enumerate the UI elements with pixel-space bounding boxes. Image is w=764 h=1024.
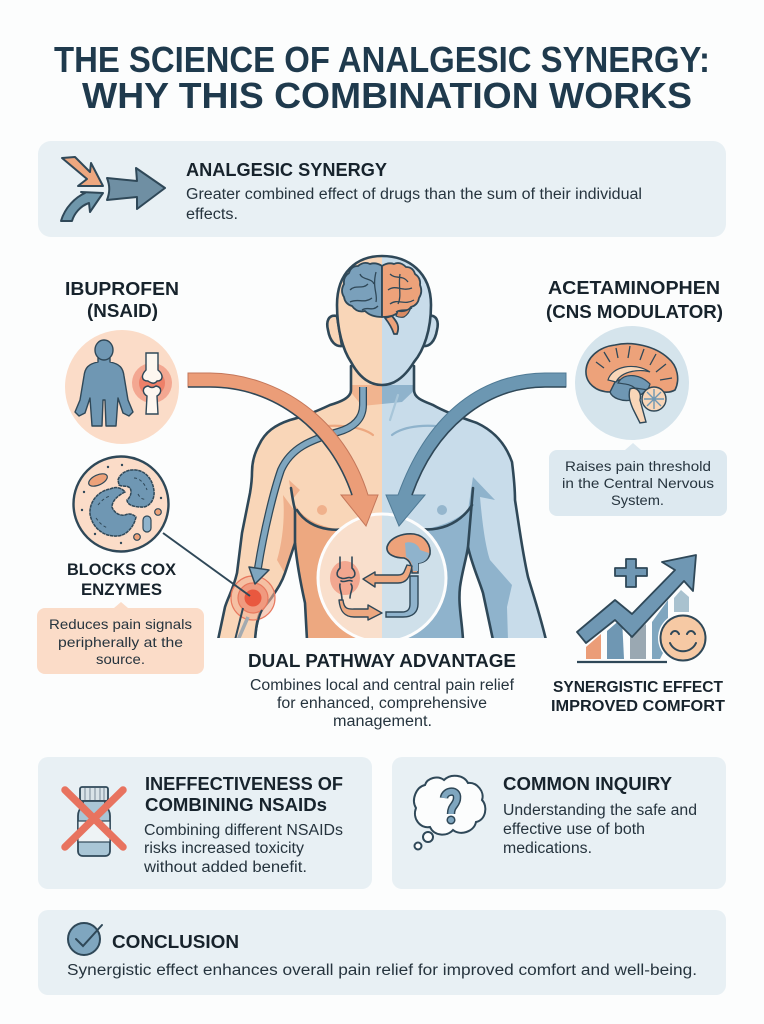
icon: converging arrows [61, 157, 165, 221]
label: synergistic effect [551, 679, 725, 715]
callout: raises pain threshold: Raises pain threshold [565, 458, 711, 474]
label: synergistic effect: SYNERGISTIC EFFECT [553, 679, 723, 696]
collar and nipple marks [316, 395, 449, 435]
inset brain [387, 534, 430, 573]
callout: raises pain threshold: in the Central Nervous [562, 475, 714, 491]
heading: ACETAMINOPHEN [548, 278, 720, 298]
panel: analgesic synergy [38, 141, 726, 237]
icon: COX enzymes [74, 456, 168, 552]
body outline [218, 366, 546, 640]
description: effects. [186, 206, 238, 223]
arrow: thin blue nerve pathway [249, 387, 363, 584]
heading: (NSAID) [87, 301, 158, 321]
arrow: acetaminophen pathway [386, 373, 566, 526]
heading [546, 278, 723, 322]
heading: INEFFECTIVENESS OF [145, 774, 343, 794]
inset arrows [363, 565, 412, 587]
callout: raises pain threshold: System. [611, 492, 664, 508]
label: blocks cox enzymes: BLOCKS COX [67, 561, 176, 579]
label: synergistic effect: IMPROVED COMFORT [551, 698, 725, 715]
title: THE SCIENCE OF ANALGESIC SYNERGY: [54, 39, 710, 80]
arrow: ibuprofen pathway [188, 373, 378, 526]
callout line from enzyme to elbow [163, 533, 250, 596]
description: without added benefit. [143, 859, 307, 876]
icon: thought bubble with question mark [414, 776, 485, 850]
inset joint [330, 561, 360, 595]
icon: crossed-out bottle [65, 787, 123, 856]
torso fill and shading [220, 364, 544, 638]
title [54, 39, 710, 116]
description [503, 802, 697, 857]
heading: COMBINING NSAIDs [145, 795, 327, 815]
text block: dual pathway advantage: management. [333, 713, 432, 730]
panel: common inquiry [392, 757, 726, 889]
callout: reduces pain signals: Reduces pain signals [49, 616, 192, 632]
central body figure [162, 254, 566, 638]
panel: ibuprofen [37, 279, 204, 674]
heading: (CNS MODULATOR) [546, 302, 723, 322]
brain in head [342, 263, 421, 334]
heading: IBUPROFEN [65, 279, 179, 299]
description: Understanding the safe and [503, 802, 697, 819]
icon: person with inflamed joint [65, 330, 179, 444]
callout: reduces pain signals: peripherally at the [58, 634, 183, 650]
description: Greater combined effect of drugs than the sum of their individual [186, 186, 642, 203]
pain site on elbow [231, 576, 275, 640]
heading: ANALGESIC SYNERGY [186, 160, 387, 180]
description [186, 186, 642, 223]
callout: reduces pain signals: source. [96, 651, 145, 667]
heading: CONCLUSION [112, 932, 239, 952]
callout: reduces pain signals [37, 602, 204, 674]
icon: synergy growth chart [577, 555, 708, 663]
heading: COMMON INQUIRY [503, 774, 672, 794]
description [143, 822, 343, 876]
callout: raises pain threshold [549, 443, 727, 516]
panel: conclusion [38, 910, 726, 995]
title: WHY THIS COMBINATION WORKS [82, 75, 692, 116]
icon: brain cross-section [575, 326, 689, 440]
label: blocks cox enzymes [67, 561, 176, 599]
description: risks increased toxicity [144, 840, 304, 857]
head [327, 256, 438, 385]
panel: ineffectiveness of combining NSAIDs [38, 757, 372, 889]
text block: dual pathway advantage: for enhanced, comprehensive [277, 695, 487, 712]
text block: dual pathway advantage [248, 651, 516, 730]
description: medications. [503, 840, 592, 857]
description: Synergistic effect enhances overall pain relief for improved comfort and well-being. [67, 962, 697, 979]
text block: dual pathway advantage: DUAL PATHWAY ADVANTAGE [248, 651, 516, 671]
heading [65, 279, 179, 321]
description: effective use of both [503, 821, 645, 838]
text block: dual pathway advantage: Combines local and central pain relief [250, 677, 515, 694]
description: Combining different NSAIDs [144, 822, 343, 839]
label: blocks cox enzymes: ENZYMES [81, 581, 162, 599]
heading [145, 774, 343, 815]
centre circle: dual pathway inset [318, 514, 446, 642]
panel: acetaminophen [546, 278, 727, 715]
icon: check mark [68, 923, 102, 955]
